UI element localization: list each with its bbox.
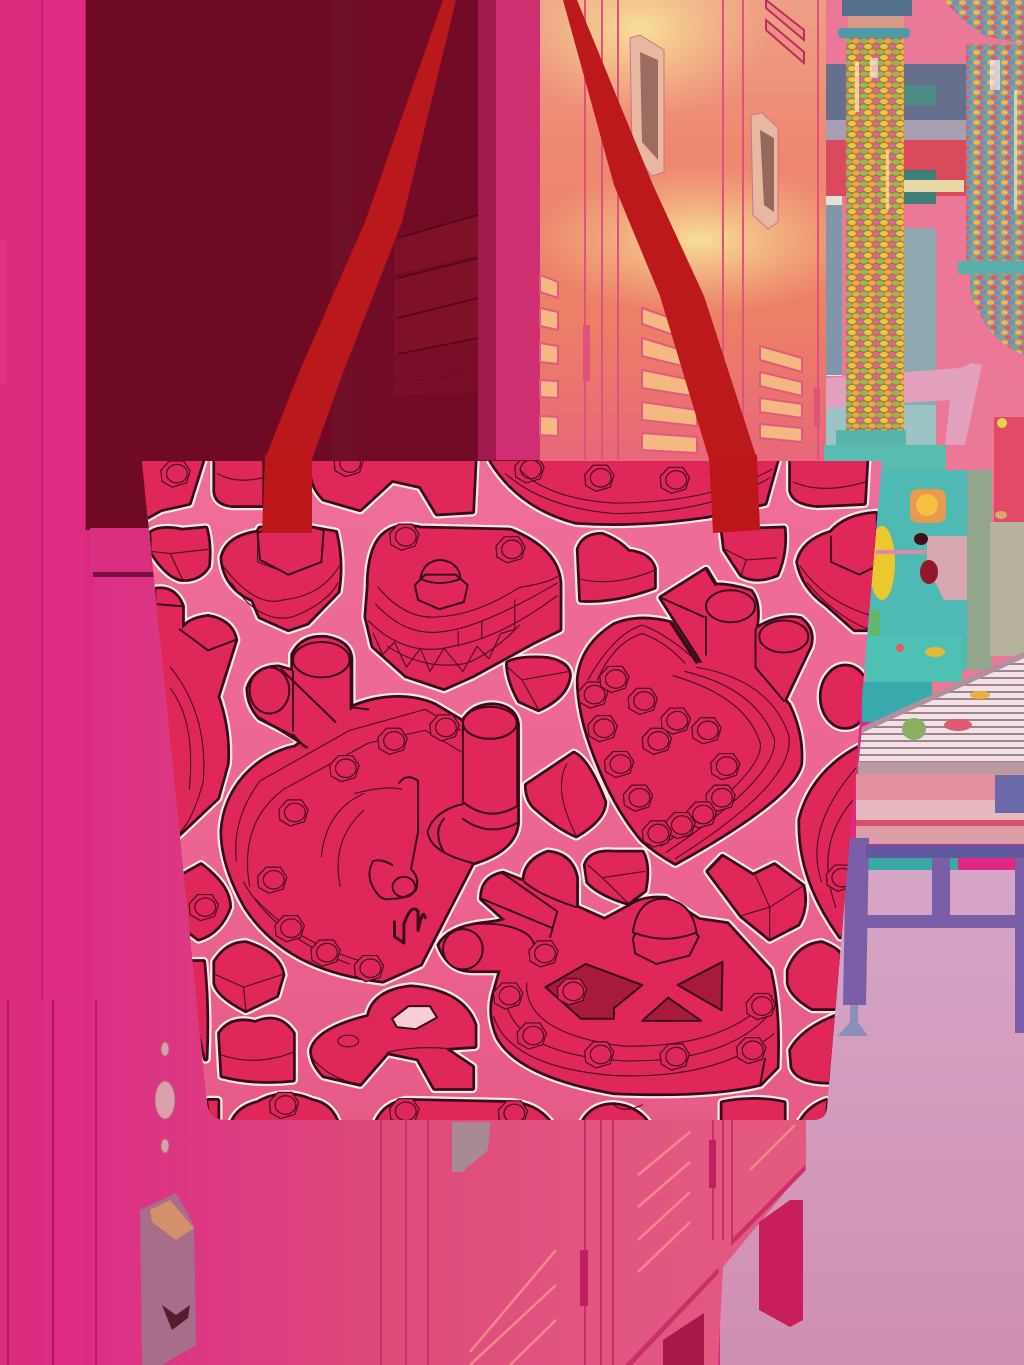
upper right lockers	[540, 0, 826, 461]
locker studs	[155, 1042, 175, 1153]
print details: bottom heart opening	[443, 874, 775, 1084]
candy tube right	[944, 0, 1024, 355]
top right vents	[766, 0, 804, 63]
tote straps	[262, 0, 760, 533]
print: dark contour	[142, 461, 876, 1134]
right steel machine and red panel	[990, 417, 1024, 656]
conveyor belt	[856, 652, 1024, 844]
candy tube left	[836, 0, 912, 446]
print: heart machine shapes	[142, 461, 876, 1134]
open locker interior	[86, 0, 541, 530]
teal machine	[824, 445, 992, 873]
print details: right heart	[579, 570, 808, 859]
print details: wrench and small pieces	[151, 450, 876, 1127]
locker shelf ledge	[90, 528, 150, 574]
bag print in zoomed coordinates	[142, 450, 876, 1134]
left locker column	[0, 0, 87, 1365]
factory background	[826, 0, 1024, 700]
right strap	[563, 0, 760, 533]
locker latch plates	[630, 35, 778, 229]
print details: top gear heart	[369, 524, 557, 671]
print details: big heart lines	[236, 642, 517, 982]
open door vents	[394, 215, 478, 396]
bag base	[142, 461, 882, 1121]
locker handle	[140, 1193, 196, 1365]
conveyor legs	[838, 838, 1024, 1036]
upper locker vents	[540, 275, 802, 453]
lower left locker door	[93, 572, 393, 1365]
lower locker vents	[470, 1125, 795, 1365]
strap tabs stitched on the bag	[262, 455, 760, 533]
print: white halos	[142, 461, 876, 1134]
lower centre lockers	[380, 1120, 806, 1365]
left strap	[262, 0, 456, 533]
floor	[720, 870, 1024, 1365]
tote bag body	[142, 450, 882, 1134]
